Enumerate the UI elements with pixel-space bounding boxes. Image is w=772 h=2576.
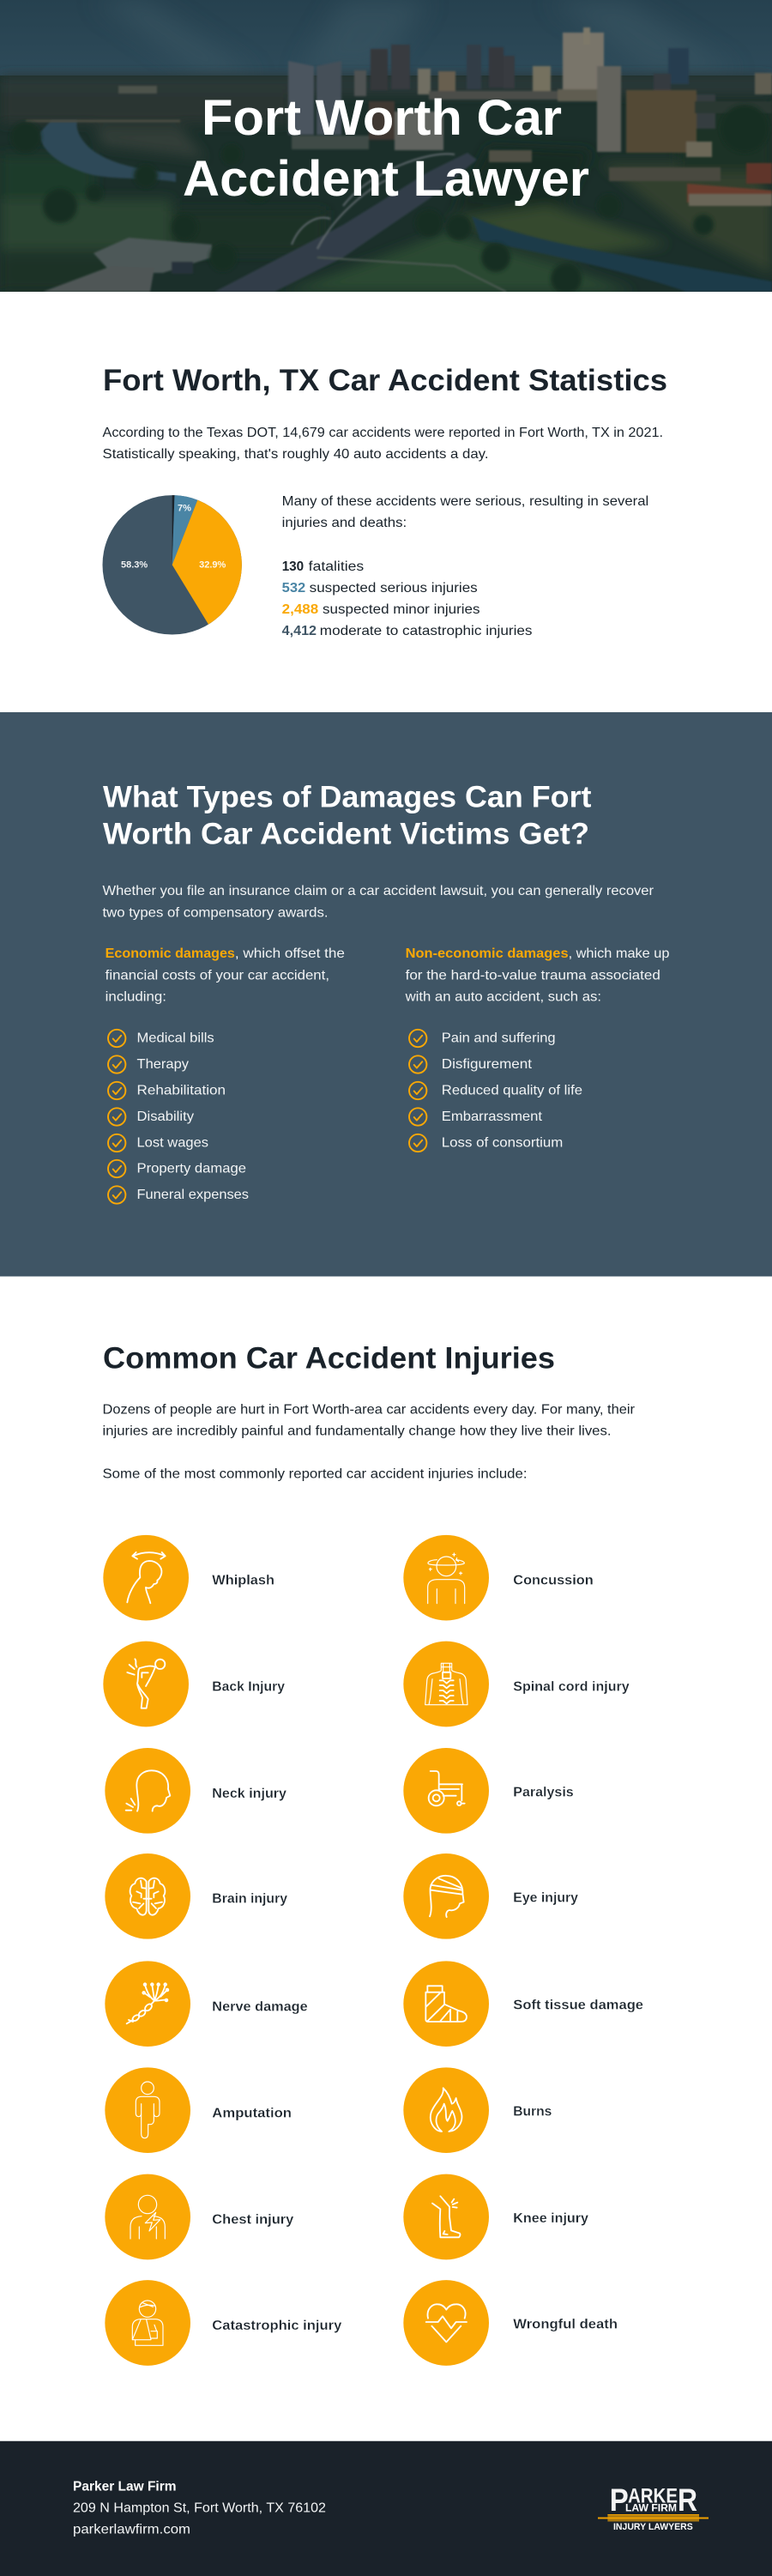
panel: statistics xyxy=(103,364,667,638)
text block: economic damages: financial costs of your car accident, xyxy=(106,968,329,983)
stat: fatalities: fatalities xyxy=(309,559,364,574)
stat: moderate injuries: 4,412 xyxy=(282,624,317,638)
injury: spinal cord injury xyxy=(403,1642,630,1726)
text block: damages intro xyxy=(103,884,654,921)
injury: knee injury xyxy=(403,2174,588,2259)
injury: catastrophic injury: Catastrophic injury xyxy=(212,2319,341,2333)
injury: eye injury: Eye injury xyxy=(513,1891,578,1906)
pie chart: 58.3% xyxy=(121,559,148,570)
injury: soft tissue damage xyxy=(403,1961,643,2047)
injury: soft tissue damage: Soft tissue damage xyxy=(513,1999,643,2013)
stat: minor injuries: 2,488 xyxy=(282,602,318,617)
footer xyxy=(0,2440,772,2576)
panel: common injuries xyxy=(103,1341,643,2366)
injury: amputation xyxy=(105,2067,292,2153)
text block: serious accidents intro xyxy=(282,494,648,530)
skyline buildings xyxy=(43,27,772,292)
stat: serious injuries: suspected serious injuries xyxy=(310,581,478,596)
title: Accident Lawyer xyxy=(183,151,589,207)
text block: statistics intro: According to the Texas DOT, 14,679 car accidents were reported in Fort Worth, TX in 2021. xyxy=(103,426,663,440)
logo: Parker Law Firm Injury Lawyers: INJURY LAWYERS xyxy=(613,2522,693,2532)
stat: fatalities xyxy=(282,559,364,574)
injury: wrongful death xyxy=(403,2280,618,2366)
hero panel: Fort Worth skyline xyxy=(0,0,772,294)
injury: brain injury: Brain injury xyxy=(212,1892,287,1907)
checklist: economic damages xyxy=(108,1030,249,1204)
heading: damages: Worth Car Accident Victims Get? xyxy=(103,818,589,851)
text block: injuries intro: Some of the most commonly reported car accident injuries include: xyxy=(103,1467,527,1482)
text block: serious accidents intro: Many of these accidents were serious, resulting in several xyxy=(282,494,648,509)
footer contact details: 209 N Hampton St, Fort Worth, TX 76102 xyxy=(73,2501,326,2516)
injury: neck injury: Neck injury xyxy=(212,1787,286,1801)
footer contact details xyxy=(73,2479,326,2537)
title: Fort Worth Car xyxy=(202,90,562,146)
text block: non-economic damages: with an auto accident, such as: xyxy=(405,989,601,1004)
stat: serious injuries: 532 xyxy=(282,581,305,596)
injury: paralysis xyxy=(403,1748,574,1834)
text block: economic damages: Economic damages xyxy=(106,946,235,961)
injury: chest injury xyxy=(105,2174,293,2259)
injury: concussion xyxy=(403,1535,594,1620)
injury: brain injury xyxy=(105,1853,287,1939)
checklist: non-economic damages: Embarrassment xyxy=(442,1110,543,1124)
checklist: economic damages: Lost wages xyxy=(137,1136,208,1151)
logo: Parker Law Firm Injury Lawyers xyxy=(598,2482,709,2532)
bridge road xyxy=(26,121,506,292)
injury: concussion: Concussion xyxy=(513,1574,594,1588)
checklist: non-economic damages: Loss of consortium xyxy=(442,1136,563,1151)
checklist: economic damages: Disability xyxy=(137,1110,194,1124)
injury: amputation: Amputation xyxy=(212,2106,292,2120)
pie chart xyxy=(103,495,242,635)
logo: Parker Law Firm Injury Lawyers: ARKE xyxy=(628,2485,678,2507)
pie chart: 7% xyxy=(178,503,191,513)
logo: Parker Law Firm Injury Lawyers: R xyxy=(678,2482,697,2518)
pie chart: 32.9% xyxy=(199,559,226,570)
injury: whiplash xyxy=(103,1535,274,1620)
injury: burns: Burns xyxy=(513,2105,552,2119)
injury: back injury: Back Injury xyxy=(212,1679,285,1694)
text block: non-economic damages: Non-economic damages xyxy=(406,946,569,961)
injury: neck injury xyxy=(105,1748,286,1834)
heading: statistics: Fort Worth, TX Car Accident Statistics xyxy=(103,364,667,397)
injury: knee injury: Knee injury xyxy=(513,2211,588,2226)
checklist: economic damages: Property damage xyxy=(137,1162,246,1176)
text block: injuries intro: Dozens of people are hurt in Fort Worth-area car accidents every day. For many, their xyxy=(103,1402,636,1417)
text block: statistics intro xyxy=(103,426,663,462)
checklist: non-economic damages xyxy=(409,1030,582,1152)
text block: non-economic damages xyxy=(405,946,670,1004)
footer contact details: Parker Law Firm xyxy=(73,2479,177,2494)
injury: catastrophic injury xyxy=(105,2280,341,2366)
text block: statistics intro: Statistically speaking, that's roughly 40 auto accidents a day. xyxy=(103,447,489,462)
heading: damages xyxy=(103,781,592,851)
checklist: non-economic damages: Disfigurement xyxy=(442,1057,533,1072)
logo: Parker Law Firm Injury Lawyers: LAW FIRM xyxy=(625,2504,677,2514)
stat: moderate injuries: moderate to catastrophic injuries xyxy=(320,624,532,638)
injury: whiplash: Whiplash xyxy=(212,1574,274,1588)
text block: damages intro: two types of compensatory awards. xyxy=(103,906,328,921)
injury: eye injury xyxy=(403,1853,578,1939)
text block: serious accidents intro: injuries and deaths: xyxy=(282,516,407,530)
river xyxy=(39,120,772,292)
stat: fatalities: 130 xyxy=(282,559,304,574)
stat: minor injuries: suspected minor injuries xyxy=(323,602,480,617)
logo: Parker Law Firm Injury Lawyers: P xyxy=(610,2482,629,2518)
text block: damages intro: Whether you file an insurance claim or a car accident lawsuit, you can generally recover xyxy=(103,884,654,898)
title xyxy=(183,90,589,207)
checklist: economic damages: Rehabilitation xyxy=(137,1084,226,1098)
text block: injuries intro: injuries are incredibly painful and fundamentally change how they live their lives. xyxy=(103,1424,612,1438)
text block: injuries intro xyxy=(103,1402,636,1482)
injury: paralysis: Paralysis xyxy=(513,1786,574,1800)
trees xyxy=(10,105,769,294)
text block: non-economic damages: for the hard-to-value trauma associated xyxy=(406,968,660,983)
panel: damages xyxy=(0,712,772,1277)
text block: economic damages xyxy=(106,946,345,1004)
checklist: economic damages: Therapy xyxy=(137,1057,189,1072)
heading: common injuries: Common Car Accident Injuries xyxy=(103,1341,555,1375)
checklist: non-economic damages: Reduced quality of life xyxy=(442,1084,582,1098)
checklist: economic damages: Medical bills xyxy=(137,1031,214,1046)
low block bottom-left xyxy=(93,238,212,273)
checklist: non-economic damages: Pain and suffering xyxy=(442,1031,556,1046)
text block: economic damages: including: xyxy=(106,989,166,1004)
injury: wrongful death: Wrongful death xyxy=(513,2317,618,2331)
injury: nerve damage: Nerve damage xyxy=(212,1999,308,2014)
footer contact details: parkerlawfirm.com xyxy=(73,2523,190,2537)
injury: chest injury: Chest injury xyxy=(212,2213,293,2228)
text block: non-economic damages: , which make up xyxy=(569,946,670,961)
injury: back injury xyxy=(103,1642,285,1726)
heading: damages: What Types of Damages Can Fort xyxy=(103,781,592,814)
injury: nerve damage xyxy=(105,1961,308,2047)
text block: economic damages: , which offset the xyxy=(235,946,345,961)
injury: spinal cord injury: Spinal cord injury xyxy=(513,1679,630,1694)
checklist: economic damages: Funeral expenses xyxy=(137,1188,249,1202)
injury: burns xyxy=(403,2067,552,2153)
